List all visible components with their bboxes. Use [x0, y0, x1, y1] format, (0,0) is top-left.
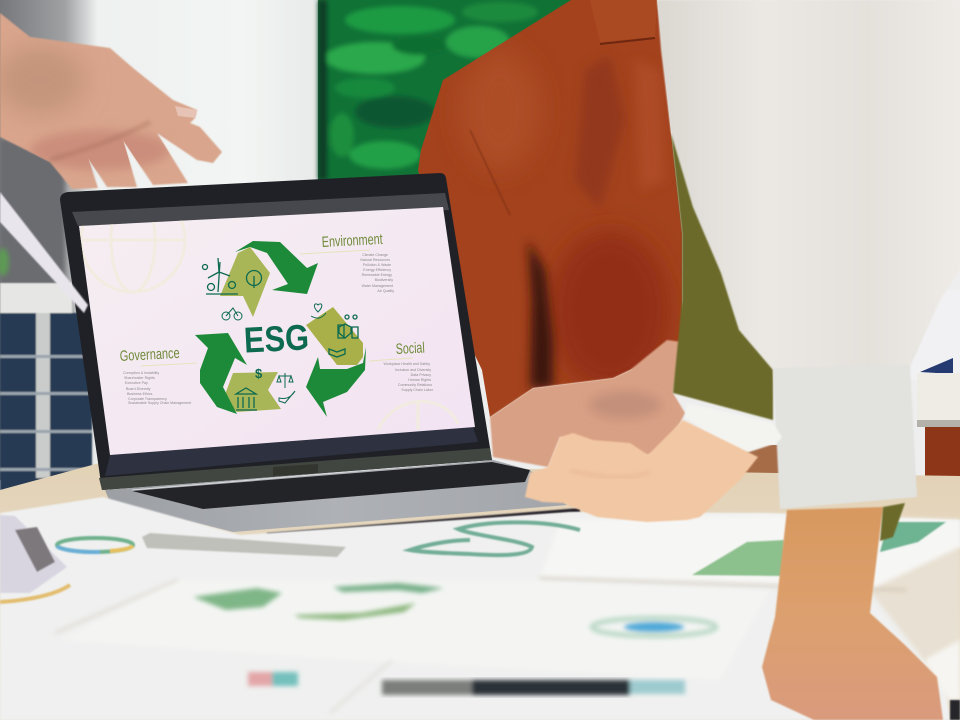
- paper sheets and creases: [55, 515, 960, 713]
- device on desk: [0, 515, 67, 593]
- social olive chevron: [306, 307, 363, 365]
- icon: scales and hand: [277, 373, 295, 403]
- second arc near device: [0, 585, 70, 602]
- icon: bicycle: [222, 308, 242, 320]
- laptop hinge band: [99, 448, 492, 490]
- big white cuff: [773, 365, 917, 509]
- text block: environment list: [360, 253, 394, 293]
- background: right side shelf and rust fabric: [735, 290, 960, 477]
- text block: environment list: Water Management: [362, 284, 393, 288]
- governance olive chevron: [223, 372, 281, 412]
- text block: environment list: Biodiversity: [375, 278, 393, 282]
- icon: heart in hand: [311, 304, 326, 318]
- governance arrow: [195, 333, 247, 414]
- icon: dollar: $: [255, 366, 263, 381]
- desk corner shadow: [950, 700, 960, 720]
- colour swatch: [248, 672, 274, 686]
- text block: governance list: [123, 371, 191, 405]
- olive inner layer: [671, 133, 773, 420]
- small white cuff: [685, 403, 782, 455]
- person: forearm and hand behind laptop: [490, 340, 685, 467]
- ESG label: ESG: [243, 316, 310, 361]
- olive cuff accent: [880, 503, 905, 541]
- laptop top bezel band: [72, 193, 449, 226]
- person: arm and hand leaning on desk: [762, 503, 943, 720]
- background: green foliage window: [318, 0, 578, 180]
- laptop base and keyboard: [105, 459, 580, 535]
- pole at left: [0, 192, 88, 313]
- person: top-left hand: [0, 13, 222, 189]
- text block: governance list: Sustainable Supply Chain Management: [128, 401, 191, 405]
- person: hand on laptop: [525, 420, 758, 522]
- text block: environment list: Natural Resources: [360, 258, 390, 262]
- text block: social list: [384, 362, 434, 392]
- text block: environment list: Energy Efficiency: [363, 268, 391, 272]
- background: solar panel rack: [0, 283, 92, 491]
- laptop: [60, 173, 580, 535]
- text block: environment list: Pollution & Waste: [363, 263, 391, 267]
- icon: courthouse: [236, 388, 257, 410]
- text block: governance list: Corruption & Instability: [123, 371, 159, 375]
- heading: Social: [369, 340, 425, 361]
- text block: social list: Data Privacy: [411, 373, 431, 377]
- text block: governance list: Shareholder Rights: [124, 376, 155, 380]
- background: curtain and room: [0, 0, 325, 480]
- text block: governance list: Executive Pay: [125, 381, 148, 385]
- ESG recycling diagram: [195, 241, 366, 417]
- person: white sleeve: [657, 0, 960, 509]
- text block: social list: Workplace Health and Safety: [384, 362, 430, 366]
- text block: governance list: Corporate Transparency: [128, 397, 167, 401]
- paper graphics: donut, loop, green chart: [0, 522, 946, 602]
- environment olive chevron: [220, 247, 270, 317]
- laptop lid frame: [60, 173, 492, 490]
- laptop screen: [79, 207, 475, 455]
- environment arrow: [235, 241, 318, 294]
- heading: Environment: Environment: [321, 231, 384, 251]
- icon: family shield: [338, 315, 358, 338]
- green chart blocks: [692, 540, 784, 576]
- social arrow: [306, 347, 366, 417]
- text block: social list: Community Relations: [398, 383, 432, 387]
- text block: environment list: Renewable Energy: [362, 273, 392, 277]
- table top: [0, 462, 960, 720]
- laptop camera notch: [273, 464, 318, 476]
- icon: tree: [246, 270, 262, 288]
- blue ring chart: [592, 618, 716, 636]
- dollar loop graphic: [410, 522, 580, 555]
- text block: environment list: Climate Change: [362, 253, 388, 257]
- text block: social list: Supply Chain Labor: [401, 388, 434, 392]
- text block: environment list: Air Quality: [377, 289, 394, 293]
- heading: Environment: [300, 231, 384, 254]
- laptop bottom bezel reflection: [105, 427, 478, 476]
- donut chart: [57, 538, 133, 552]
- text block: governance list: Board Diversity: [126, 387, 151, 391]
- heading: Social: Social: [395, 340, 425, 358]
- pen in foreground: [382, 680, 685, 695]
- text block: governance list: Business Ethics: [127, 392, 153, 396]
- icon: handshake: [329, 349, 345, 357]
- screen watermark globes: [80, 220, 460, 430]
- text block: social list: Inclusion and Diversity: [395, 368, 431, 372]
- recycling shape left: [193, 588, 282, 610]
- text block: social list: Human Rights: [408, 378, 431, 382]
- icon: wind turbine: [202, 258, 238, 294]
- heading: Governance: Governance: [119, 345, 180, 365]
- recycling shape right: [333, 583, 444, 593]
- papers on desk: [0, 497, 960, 720]
- pen on desk: [142, 533, 346, 557]
- person: rust shirt: [418, 0, 682, 417]
